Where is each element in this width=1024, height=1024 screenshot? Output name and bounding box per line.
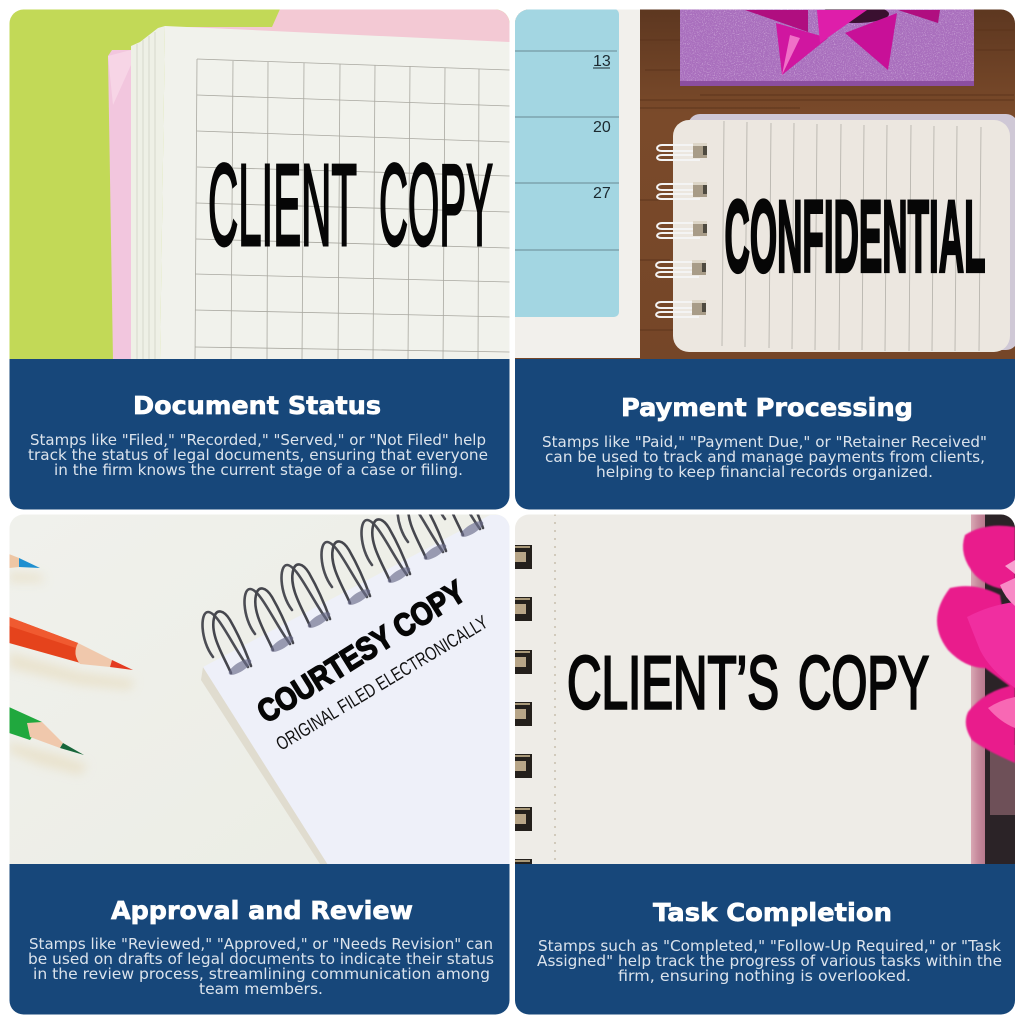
body text: in the firm knows the current stage of a case or filing.	[54, 461, 463, 479]
grid lines	[195, 59, 510, 360]
caption band	[10, 864, 510, 1015]
caption band	[10, 359, 510, 510]
body text: can be used to track and manage payments from clients,	[545, 448, 985, 466]
stamp text: CLIENT'S COPY: COPY	[798, 640, 929, 724]
pencil shadows	[9, 572, 135, 775]
photo: spiral notepad with colored pencils on white desk	[10, 514, 510, 864]
bow	[745, 5, 940, 75]
stamp text: CLIENT COPY: CLIENT	[208, 140, 357, 270]
body text: Stamps like "Paid," "Payment Due," or "Retainer Received"	[542, 433, 987, 451]
spiral rings	[656, 143, 707, 317]
stamp text: CLIENT'S COPY: CLIENT’S	[567, 640, 779, 724]
body text	[542, 433, 987, 481]
caption band	[515, 864, 1015, 1015]
body text: Stamps like "Filed," "Recorded," "Served," or "Not Filed" help	[30, 431, 486, 449]
gift box	[680, 9, 974, 86]
photo: notebook with grid paper on green and pink background	[9, 9, 510, 360]
body text: in the review process, streamlining communication among	[33, 965, 490, 983]
body text: be used on drafts of legal documents to indicate their status	[28, 950, 494, 968]
heading: Payment Processing: Payment Processing	[621, 393, 913, 422]
text: COPY	[379, 140, 493, 270]
panel: Approval and Review	[9, 473, 510, 1015]
stamp text: CLIENT'S COPY	[568, 654, 930, 710]
notepad	[201, 667, 330, 864]
body text: Assigned" help track the progress of various tasks within the	[537, 952, 1002, 970]
heading: Approval and Review: Approval and Review	[111, 896, 413, 925]
spiral rings	[201, 514, 484, 675]
caption band	[515, 359, 1015, 510]
body text: Stamps such as "Completed," "Follow-Up Required," or "Task	[538, 937, 1001, 955]
stamp text: CLIENT COPY	[210, 162, 493, 248]
photo: spiral notepad on wooden desk with gift and calendar: 20	[593, 119, 611, 136]
photo: spiral notepad on wooden desk with gift and calendar: 13	[593, 53, 611, 70]
stamp text: ORIGINAL FILED ELECTRONICALLY: ORIGINAL FILED ELECTRONICALLY	[273, 612, 492, 755]
notepad	[688, 114, 1018, 350]
pencil: red	[9, 617, 133, 670]
heading: Task Completion: Task Completion	[653, 898, 892, 927]
body text: Stamps like "Reviewed," "Approved," or "Needs Revision" can	[29, 935, 493, 953]
planner edge	[971, 514, 985, 865]
body text: track the status of legal documents, ensuring that everyone	[28, 446, 488, 464]
body text	[537, 937, 1002, 985]
body text: helping to keep financial records organized.	[596, 463, 933, 481]
flowers	[937, 526, 1015, 763]
body text	[29, 938, 494, 994]
binding holes	[515, 545, 532, 883]
stamp text: COURTESY COPY: COURTESY COPY	[251, 573, 472, 730]
pencil: blue	[9, 554, 40, 568]
heading: Document Status: Document Status	[133, 391, 381, 420]
photo: spiral notebook page with pink flowers	[515, 514, 1015, 883]
panel: Task Completion	[515, 514, 1015, 1015]
photo: spiral notepad on wooden desk with gift and calendar	[500, 5, 1018, 360]
photo: spiral notepad on wooden desk with gift and calendar: 27	[593, 185, 611, 202]
body text: team members.	[199, 980, 323, 998]
panel: Payment Processing	[500, 5, 1018, 510]
body text: firm, ensuring nothing is overlooked.	[618, 967, 911, 985]
panel: Document Status	[9, 9, 510, 510]
calendar	[515, 9, 640, 358]
body text	[28, 431, 488, 479]
pencil: green	[9, 707, 84, 755]
